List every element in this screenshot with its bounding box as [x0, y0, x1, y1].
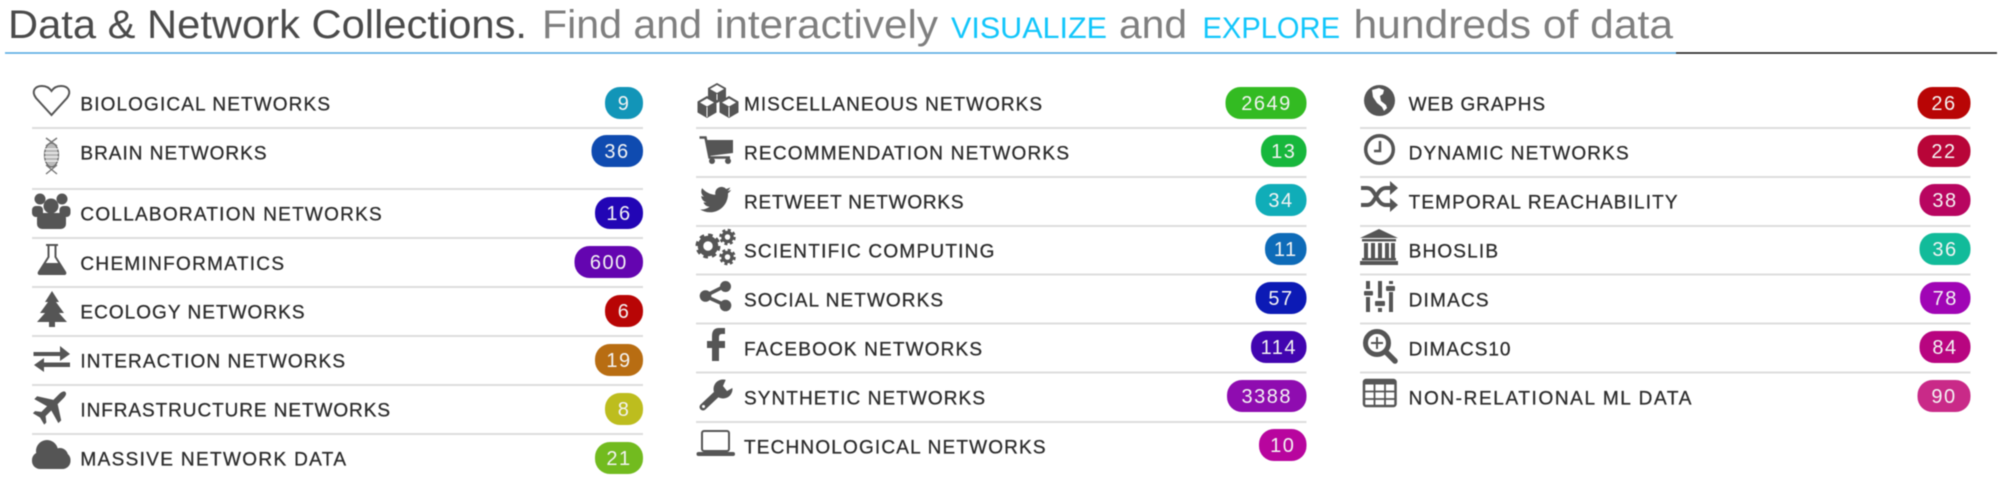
count badge: 26 — [1931, 93, 1957, 115]
row: recommendation networks — [700, 135, 1306, 167]
label: TECHNOLOGICAL NETWORKS — [744, 437, 1046, 458]
label: DIMACS — [1409, 290, 1489, 311]
count badge — [605, 87, 643, 119]
count badge: 16 — [606, 203, 632, 225]
icon: table — [1364, 380, 1396, 406]
row: massive network data — [32, 440, 643, 474]
count badge: 22 — [1931, 141, 1957, 163]
count badge — [592, 135, 643, 167]
label: WEB GRAPHS — [1409, 95, 1545, 116]
label: MASSIVE NETWORK DATA — [80, 450, 346, 471]
label: DIMACS10 — [1409, 339, 1510, 360]
title: interactively — [715, 3, 938, 47]
title: VISUALIZE — [951, 12, 1107, 45]
row: dynamic networks — [1366, 135, 1970, 167]
row: synthetic networks — [702, 377, 1306, 412]
icon: globe — [1364, 85, 1395, 116]
panel: column 2 — [696, 83, 1306, 461]
count badge — [1918, 380, 1970, 412]
row: retweet networks — [700, 184, 1306, 216]
count badge: 3388 — [1242, 386, 1292, 408]
row: bhoslib — [1360, 229, 1970, 265]
count badge — [1265, 233, 1306, 265]
label: TEMPORAL REACHABILITY — [1409, 192, 1678, 213]
count badge: 36 — [1932, 239, 1958, 261]
label: BHOSLIB — [1409, 241, 1498, 262]
title: EXPLORE — [1202, 12, 1340, 45]
count badge: 57 — [1268, 288, 1294, 310]
row: ecology networks — [37, 291, 643, 327]
icon: share — [700, 281, 731, 311]
title: and — [1119, 3, 1187, 47]
title: Find and — [542, 3, 702, 47]
icon: cubes — [698, 83, 738, 118]
label: FACEBOOK NETWORKS — [744, 339, 982, 360]
icon: exchange arrows — [34, 346, 70, 372]
count badge: 2649 — [1241, 93, 1292, 115]
label: SOCIAL NETWORKS — [744, 290, 943, 311]
count badge — [595, 344, 643, 376]
title: hundreds of data — [1354, 3, 1674, 47]
icon: tree — [37, 291, 67, 327]
icon: cart — [700, 138, 733, 164]
icon: laptop — [696, 431, 735, 456]
label: NON-RELATIONAL ML DATA — [1409, 388, 1692, 409]
panel: column 1 — [27, 86, 643, 474]
label: COLLABORATION NETWORKS — [80, 205, 382, 226]
count badge — [1251, 331, 1306, 363]
count badge: 19 — [606, 350, 632, 372]
icon: dna helix — [44, 138, 58, 174]
icon: sliders — [1364, 281, 1395, 312]
count badge — [1259, 429, 1306, 461]
count badge — [605, 295, 643, 327]
count badge: 78 — [1933, 288, 1958, 310]
row: social networks — [700, 281, 1306, 314]
label: DYNAMIC NETWORKS — [1409, 143, 1629, 164]
count badge: 13 — [1271, 141, 1296, 163]
count badge — [1920, 233, 1970, 265]
count badge: 9 — [618, 93, 630, 115]
count badge — [605, 393, 643, 425]
row: web graphs — [1364, 85, 1970, 119]
icon: people — [32, 194, 70, 229]
label: RECOMMENDATION NETWORKS — [744, 143, 1069, 164]
label: BRAIN NETWORKS — [80, 143, 267, 164]
row: collaboration networks — [32, 194, 643, 229]
icon: facebook f — [707, 328, 725, 361]
icon: clock — [1366, 136, 1393, 163]
label: MISCELLANEOUS NETWORKS — [744, 95, 1042, 116]
count badge — [1918, 135, 1970, 167]
count badge — [1261, 135, 1306, 167]
label: ECOLOGY NETWORKS — [80, 303, 305, 324]
row: interaction networks — [34, 344, 643, 376]
row: dimacs10 — [1366, 331, 1970, 363]
row: biological networks — [34, 86, 643, 119]
icon: flask — [38, 245, 66, 275]
icon: bird — [700, 187, 731, 212]
count badge — [1227, 380, 1306, 412]
count badge: 6 — [618, 301, 630, 323]
count badge: 36 — [604, 141, 630, 163]
row: cheminformatics — [38, 245, 643, 278]
count badge — [1256, 184, 1306, 216]
row: infrastructure networks — [27, 380, 643, 431]
label: CHEMINFORMATICS — [80, 254, 284, 275]
count badge — [1226, 87, 1306, 119]
icon: bank — [1360, 229, 1398, 265]
row: brain networks — [44, 135, 643, 174]
count badge — [1256, 282, 1306, 314]
icon: wrench — [702, 377, 736, 408]
icon: cloud — [32, 440, 70, 469]
icon: magnifier plus — [1366, 332, 1395, 361]
count badge: 34 — [1268, 190, 1294, 212]
icon: gears — [697, 230, 734, 264]
row: facebook networks — [707, 328, 1306, 363]
title — [8, 3, 1674, 47]
count badge: 38 — [1932, 190, 1958, 212]
row: scientific computing — [697, 230, 1306, 265]
count badge: 21 — [606, 448, 632, 470]
icon: shuffle — [1361, 181, 1398, 212]
row: non-relational ml data — [1364, 380, 1970, 412]
row: dimacs — [1364, 281, 1970, 314]
label: BIOLOGICAL NETWORKS — [80, 95, 330, 116]
label: SYNTHETIC NETWORKS — [744, 388, 985, 409]
count badge: 10 — [1270, 435, 1295, 457]
count badge — [595, 197, 643, 229]
title: Data & Network Collections. — [8, 3, 527, 47]
count badge — [1918, 87, 1970, 119]
icon: heart — [34, 86, 69, 115]
count badge: 8 — [618, 399, 630, 421]
icon: plane — [27, 380, 77, 431]
label: SCIENTIFIC COMPUTING — [744, 241, 994, 262]
label: INFRASTRUCTURE NETWORKS — [80, 401, 390, 422]
count badge — [1920, 331, 1970, 363]
count badge: 600 — [590, 252, 628, 274]
count badge — [574, 246, 643, 278]
count badge — [1920, 282, 1970, 314]
count badge — [595, 442, 643, 474]
panel: column 3 — [1360, 85, 1970, 412]
count badge — [1920, 184, 1970, 216]
count badge: 84 — [1932, 337, 1958, 359]
count badge: 11 — [1274, 239, 1298, 261]
label: INTERACTION NETWORKS — [80, 352, 345, 373]
label: RETWEET NETWORKS — [744, 192, 964, 213]
row: technological networks — [696, 429, 1306, 461]
row: miscellaneous networks — [698, 83, 1306, 119]
count badge: 90 — [1931, 386, 1957, 408]
row: temporal reachability — [1361, 181, 1970, 216]
count badge: 114 — [1261, 337, 1297, 359]
